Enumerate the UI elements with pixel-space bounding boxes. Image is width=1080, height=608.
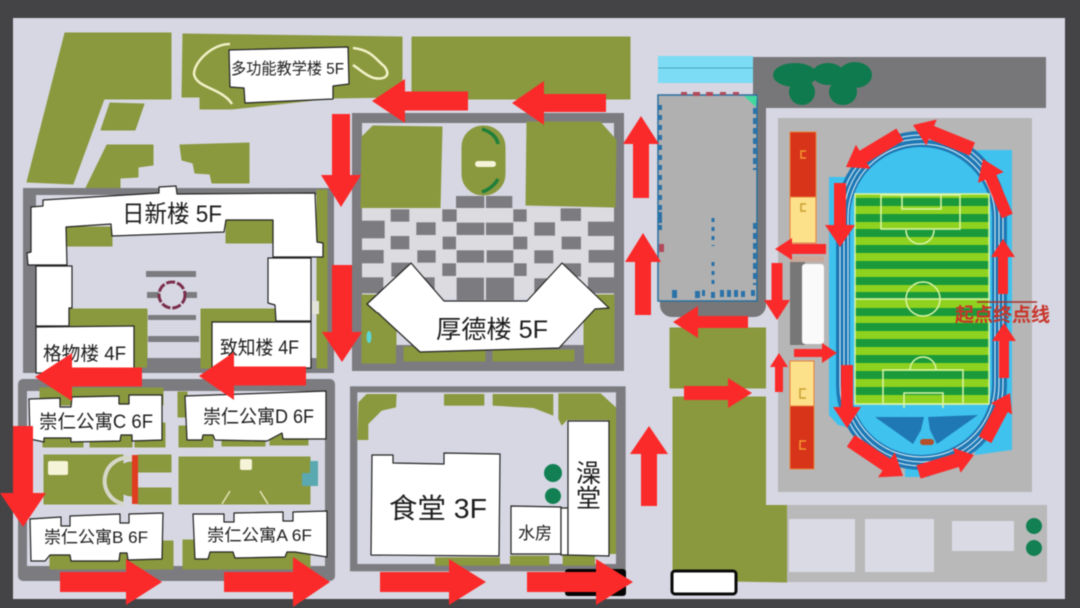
gate: black entrance	[565, 569, 626, 596]
arrow: north on central road	[630, 426, 668, 506]
arrow: west past Gewu	[35, 353, 142, 401]
building: Rixin east wing	[268, 258, 311, 321]
building: Chongren D	[185, 391, 326, 441]
arrow: track northwest bend	[839, 123, 907, 179]
building: multipurpose teaching block: 多功能教学楼 5F	[231, 60, 344, 78]
arrow: road south 2	[322, 265, 362, 362]
icon: cyan marker	[366, 331, 372, 343]
arrow: track east straight upper	[991, 239, 1015, 294]
building: Chongren B	[30, 513, 163, 561]
arrow: small north	[770, 353, 788, 392]
building: canteen: 食堂 3F	[389, 493, 487, 524]
arrow: east along south road 1	[60, 559, 162, 605]
building: Houde: 厚德楼 5F	[436, 316, 548, 344]
running track	[829, 131, 1012, 477]
building: Zhizhi	[212, 322, 311, 368]
north stand	[790, 132, 816, 243]
south end seating	[875, 415, 978, 445]
building: Chongren A: 崇仁公寓A 6F	[207, 526, 312, 545]
gray road around the court	[660, 57, 1046, 317]
green strips east of road	[670, 328, 787, 582]
arrow: south on west edge	[0, 426, 46, 527]
building: Rixin west wing	[36, 266, 72, 326]
building: Chongren B: 崇仁公寓B 6F	[44, 528, 148, 547]
building: Rixin	[27, 186, 323, 265]
plaza paving blocks	[362, 196, 614, 300]
arrow: east along south road 2	[224, 557, 330, 607]
building: bathhouse: 澡	[576, 460, 601, 488]
building: bathhouse	[568, 421, 609, 556]
arrow: road south 1	[321, 114, 361, 207]
arrow: south beside grandstand	[764, 263, 790, 320]
pool	[658, 56, 753, 83]
arrow: west past Zhizhi	[199, 352, 306, 400]
icon: trees by bathhouse	[544, 464, 562, 504]
football pitch	[855, 194, 989, 408]
arrow: north road upper	[623, 116, 659, 198]
building: Houde	[367, 263, 609, 352]
oval lawn	[462, 126, 505, 195]
arrow: east along south road 4	[527, 559, 633, 605]
stadium inner ground	[778, 118, 1032, 492]
arrow: west below parking	[673, 306, 748, 338]
south stand	[790, 361, 814, 469]
building: Chongren A	[193, 511, 327, 559]
arrow: east along south road 3	[380, 559, 486, 605]
block: Rixin compound	[23, 188, 334, 373]
icon: trees at southeast corner	[1026, 518, 1042, 556]
arrow: east to stadium	[684, 378, 752, 408]
arrow: top road west 2	[512, 81, 606, 125]
arrow: track southeast bend	[975, 387, 1021, 445]
block: canteen compound	[350, 386, 626, 571]
icon: courtyard ring	[159, 282, 185, 308]
main grandstand	[790, 256, 824, 345]
building: Rixin: 日新楼 5F	[122, 201, 222, 228]
building: Chongren D: 崇仁公寓D 6F	[203, 406, 314, 428]
north green areas	[27, 33, 630, 190]
start and finish line label: 起点终点线	[955, 304, 1050, 326]
building: water room: 水房	[518, 524, 552, 543]
arrow: track east straight lower	[992, 323, 1016, 378]
building: Gewu: 格物楼 4F	[43, 343, 126, 365]
arrow: track north bend	[908, 112, 978, 162]
arrow: track west straight upper	[825, 183, 855, 247]
arrow: north road lower	[625, 233, 661, 315]
building: multipurpose teaching block	[229, 47, 349, 103]
building: water room	[511, 506, 568, 555]
arrow: track west straight lower	[833, 365, 861, 428]
stadium outer light zone	[766, 108, 1047, 505]
building: Chongren C: 崇仁公寓C 6F	[39, 411, 153, 433]
arrow: small east to track	[794, 343, 837, 363]
building: Chongren C	[29, 395, 162, 442]
building: Zhizhi: 致知楼 4F	[220, 337, 299, 359]
building: Gewu	[36, 326, 134, 373]
tree cluster	[773, 62, 872, 105]
south parking area	[787, 505, 1047, 582]
building: canteen	[371, 453, 500, 556]
arrow: track south bend	[915, 443, 978, 484]
arrow: track northeast bend	[970, 154, 1020, 222]
arrow: out of stadium west	[775, 238, 826, 260]
sports court block	[658, 92, 757, 301]
block: Houde compound	[352, 113, 624, 371]
block: Chongren dormitory compound	[18, 379, 335, 581]
arrow: top road west 1	[372, 79, 468, 123]
gate: white entrance	[672, 571, 736, 594]
arrow: track southwest bend	[842, 428, 911, 488]
building: bathhouse: 堂	[576, 485, 601, 513]
